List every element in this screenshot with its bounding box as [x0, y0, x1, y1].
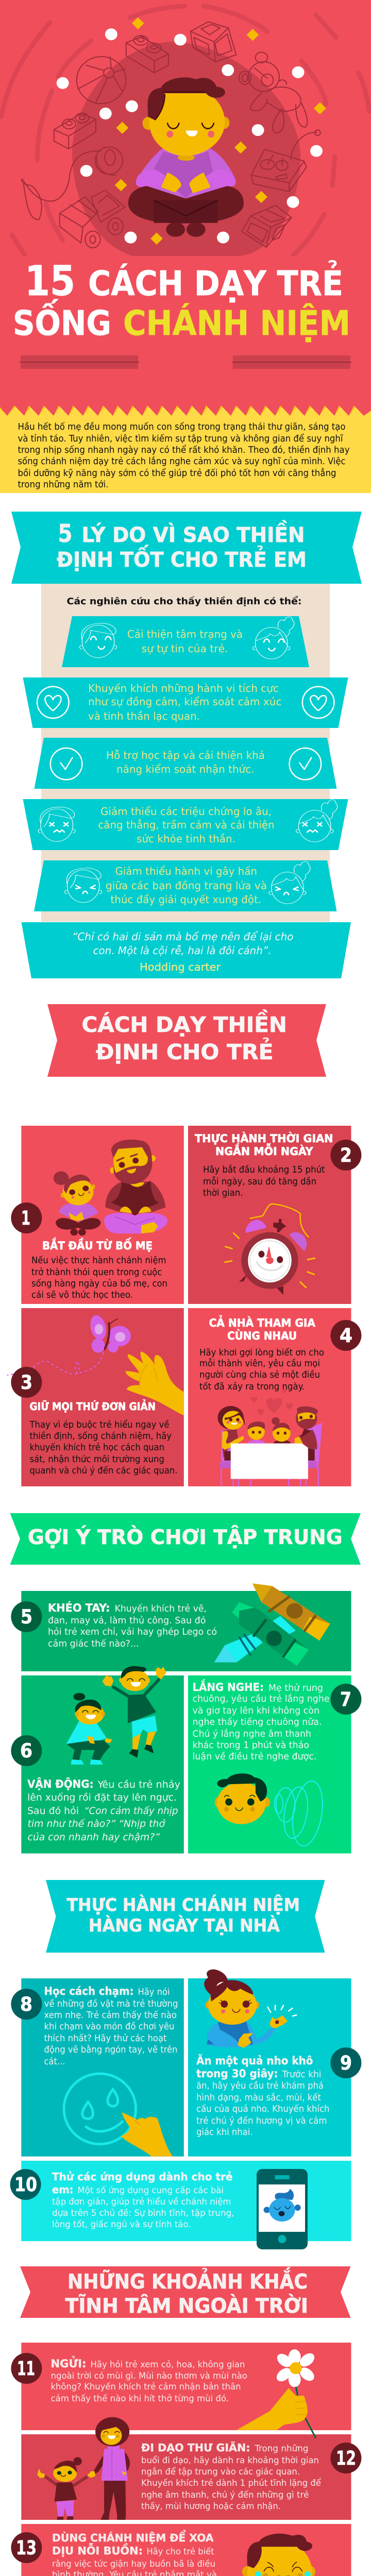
panel 3: keep it simple: GIỮ MỌI THỨ ĐƠN GIẢN — [30, 1400, 156, 1413]
text: step 4 body — [199, 1347, 324, 1392]
number badges 1-4: 3 — [21, 1371, 32, 1394]
text: step 11 body: ngoài trời có mùi gì. Mùi nào thơm và mùi nào — [50, 2371, 247, 2381]
card: mood and confidence — [62, 616, 309, 667]
illustration: crying child — [226, 2534, 339, 2576]
heading: how to teach meditation banner: ĐỊNH CHO TRẺ — [96, 1037, 273, 1064]
heading: how to teach meditation banner: CÁCH DẠY THIỀN — [81, 1009, 287, 1037]
panel 2: short daily practice — [188, 1126, 351, 1304]
text: step 9 body: trẻ chú ý đến hương vị và cảm — [196, 2115, 327, 2126]
text: step 8 body: xem nhẹ. Trẻ cảm thấy thế nào — [44, 2010, 177, 2021]
illustration: meditating child surrounded by toys — [1, 6, 369, 256]
number badges 11-13: 13 — [16, 2537, 37, 2559]
text: step 9 body — [196, 2054, 330, 2138]
illustration: crayons — [214, 1583, 330, 1666]
number badges 8-10 — [10, 1989, 361, 2200]
icon: smiling girl — [253, 617, 294, 659]
text: step 2 body — [203, 1164, 325, 1198]
panel 8: touch — [21, 1978, 184, 2157]
panel 2: short daily practice: THỰC HÀNH THỜI GIAN — [195, 1132, 333, 1145]
panel 9: raisin — [188, 1969, 351, 2157]
card: anxiety reduction: căng thẳng, trầm cảm và cải thiện — [98, 819, 274, 831]
intro text: sống chánh niệm dạy trẻ cách lắng nghe cảm xúc và suy nghĩ của mình. Việc — [18, 456, 345, 467]
number badges 5-7: 7 — [340, 1688, 351, 1710]
card: aggression reduction — [34, 860, 337, 911]
text: step 10 body: lòng tốt, giấc ngủ và sự tỉnh táo. — [52, 2219, 191, 2229]
card: quote: con. Một là cội rễ, hai là đôi cánh”. — [93, 944, 271, 957]
card: learning support: Hỗ trợ học tập và cải thiện khả — [106, 749, 265, 761]
text: step 2 body: thời gian. — [203, 1188, 243, 1198]
card: anxiety reduction — [23, 799, 348, 850]
number badges 5-7: 5 — [21, 1606, 32, 1628]
text: step 12 body: nghe âm thanh, chú ý đến những gì trẻ — [141, 2490, 309, 2500]
text: step 12 body: ngắn để tập trung vào các giác quan. — [141, 2467, 300, 2477]
text: step 8 body: cát... — [44, 2057, 65, 2067]
text: step 10 body: Thử các ứng dụng dành cho trẻ — [52, 2171, 233, 2183]
icon: frowning girl — [269, 861, 310, 904]
text: step 9 body: cấu của quả nho. Khuyến khích — [196, 2104, 330, 2114]
text: step 7 body: Chú ý lắng nghe âm thanh — [193, 1728, 311, 1739]
illustration: finger tracing a smiley — [64, 2074, 173, 2157]
text: step 12 body: buổi đi dạo, hãy dành ra khoảng thời gian — [141, 2455, 319, 2465]
number badges 11-13 — [11, 2353, 361, 2563]
text: step 6 body: của con nhanh hay chậm?” — [28, 1832, 160, 1843]
heading: daily practice banner: HÀNG NGÀY TẠI NHÀ — [89, 1915, 280, 1936]
icon: smiling boy — [80, 623, 117, 658]
illustration: jumping children — [66, 1666, 166, 1765]
text: step 13 body: DỊU NỖI BUỒN: — [52, 2543, 143, 2557]
text: step 11 body: NGỬI: — [50, 2356, 87, 2370]
text: step 7 body: luận về điều trẻ nghe được. — [193, 1751, 316, 1762]
text: step 8 body: động vẽ bằng ngón tay, vẽ trên — [44, 2044, 177, 2055]
card: mood and confidence: Cải thiện tâm trạng và — [127, 628, 243, 640]
title: CHÁNH NIỆM — [123, 303, 350, 343]
text: step 5 body: Khuyến khích trẻ vẽ, — [114, 1603, 207, 1614]
panel 6: movement — [21, 1666, 184, 1854]
text: step 6 body: lên xuống rồi đặt tay lên ngực. — [27, 1792, 177, 1803]
card: aggression reduction: giữa các bạn đồng trang lứa và — [106, 879, 267, 892]
panel: introduction — [0, 405, 371, 493]
card: mood and confidence: sự tự tin của trẻ. — [141, 642, 228, 655]
heading: daily practice banner — [46, 1880, 325, 1953]
card: learning support: năng kiểm soát nhận thức. — [116, 763, 255, 775]
card: anxiety reduction: sức khỏe tinh thần. — [137, 833, 235, 845]
text: step 5 body: hỏi trẻ xem chỉ, vải hay ghép Lego có — [48, 1627, 217, 1637]
text: step 12 body: Trong những — [254, 2444, 308, 2453]
heading: focus games banner — [10, 1513, 361, 1565]
text: step 10 body: em: — [52, 2183, 73, 2196]
card: positive behaviours: như sự đồng cảm, kiểm soát cảm xúc — [88, 696, 281, 708]
panel 13: soothing sadness — [21, 2524, 351, 2576]
text: step 4 body: người cùng chia sẻ một điều — [199, 1369, 320, 1380]
number badges 8-10: 8 — [20, 1993, 32, 2015]
panel 4: whole family: CẢ NHÀ THAM GIA — [209, 1315, 315, 1329]
text: step 6 body: tim như thế nào?” “Nhịp thở — [28, 1818, 166, 1829]
decorative bars — [20, 355, 351, 369]
text: step 12 body — [141, 2442, 321, 2511]
card: quote: Hodding carter — [140, 961, 221, 973]
panel 1: start with parents: BẮT ĐẦU TỪ BỐ MẸ — [42, 1238, 153, 1252]
panel 4: whole family — [188, 1308, 351, 1486]
text: step 10 body: dựa trên 5 chủ đề: Sự bình tĩnh, tập trung, — [52, 2208, 234, 2218]
text: step 7 body — [193, 1679, 330, 1762]
text: step 8 body: Học cách chạm: — [44, 1985, 134, 1997]
card: anxiety reduction: Giảm thiểu các triệu chứng lo âu, — [100, 805, 272, 818]
text: step 2 body: mỗi ngày, sau đó tăng dần — [203, 1176, 316, 1187]
illustration: father and daughter meditating — [54, 1140, 167, 1235]
text: step 13 body: rằng việc tức giận hay buồn bã là điều — [52, 2559, 215, 2569]
text: step 9 body: hình dạng, màu sắc, mùi, kết — [196, 2092, 321, 2103]
icon: heart badges — [37, 687, 334, 718]
text: step 8 body: Hãy nói — [138, 1987, 170, 1997]
text: step 5 body: đan, may vá, làm thủ công. Sau đó — [48, 1616, 206, 1626]
text: step 11 body: cảm thấy thế nào khi hít thở từng mùi đó. — [50, 2394, 229, 2403]
illustration: smiling alarm clock — [224, 1204, 315, 1295]
number badges 8-10: 9 — [340, 2052, 352, 2074]
text: step 3 body: sát, nhận thức môi trường xung — [30, 1454, 164, 1465]
illustration: girl holding a raisin — [204, 1969, 297, 2048]
text: step 1 body — [31, 1255, 167, 1300]
text: step 9 body: trong 30 giây: — [196, 2067, 278, 2080]
card: positive behaviours: và tinh thần lạc quan. — [88, 710, 200, 722]
text: step 3 body: thiền định, sống chánh niệm, hãy — [30, 1431, 172, 1442]
text: step 7 body: khác trong 1 phút và thảo — [193, 1740, 309, 1751]
card: aggression reduction: thúc đẩy giải quyết xung đột. — [110, 893, 261, 906]
number badges 11-13: 12 — [336, 2447, 356, 2469]
text: step 7 body: chuông, yêu cầu trẻ lắng nghe — [193, 1693, 330, 1704]
text: step 6 body: Sau đó hỏi — [27, 1805, 79, 1817]
text: step 3 body — [29, 1419, 177, 1476]
text: step 4 body: Hãy khơi gợi lòng biết ơn cho — [199, 1347, 324, 1358]
card: positive behaviours — [23, 677, 348, 728]
panel 3: keep it simple — [7, 1308, 184, 1486]
icon: dizzy boy — [38, 807, 75, 841]
title: CÁCH DẠY TRẺ — [88, 260, 343, 303]
text: step 6 body: VẬN ĐỘNG: — [27, 1777, 94, 1790]
number badges 1-4 — [11, 1140, 361, 1398]
heading: 5 reasons banner: 5 — [58, 519, 72, 548]
panel 5: handiwork — [21, 1583, 351, 1671]
panel 7: listening — [188, 1675, 351, 1854]
intro text — [18, 421, 349, 490]
text: step 1 body: Nếu việc thực hành chánh niệm — [31, 1255, 166, 1266]
panel 4: whole family: CÙNG NHAU — [227, 1329, 297, 1342]
panel 12: relaxing walk — [21, 2417, 351, 2520]
card: aggression reduction: Giảm thiểu hành vi gây hấn — [115, 865, 257, 877]
card: quote: “Chỉ có hai di sản mà bố mẹ nên để lại cho — [72, 930, 294, 943]
text: step 9 body: ăn, hãy yêu cầu trẻ khám phá — [196, 2080, 324, 2091]
text: step 12 body: Khuyến khích trẻ dành 1 phút tĩnh lặng để — [141, 2478, 321, 2488]
icon: check badges — [50, 748, 321, 779]
intro text: trong những năm tới. — [18, 480, 108, 490]
illustration: mother and child walking — [37, 2417, 130, 2520]
text: step 10 body — [52, 2171, 234, 2229]
text: step 12 body: ĐI DẠO THƯ GIÃN: — [141, 2442, 250, 2454]
text: step 4 body: mỗi thành viên, yêu cầu mọi — [199, 1358, 320, 1369]
icon: frowning boy — [65, 868, 102, 903]
text: step 6 body: Yêu cầu trẻ nhảy — [97, 1779, 180, 1790]
research lead-in: Các nghiên cứu cho thấy thiền định có thể: — [67, 596, 302, 607]
heading: daily practice banner: THỰC HÀNH CHÁNH NIỆM — [67, 1894, 300, 1916]
heading: 5 reasons banner — [11, 512, 362, 584]
text: step 9 body: Ăn một quả nho khô — [196, 2054, 313, 2067]
card: learning support — [34, 738, 337, 789]
text: step 10 body: tập đơn giản, giúp trẻ hiểu về chánh niệm — [52, 2197, 231, 2207]
text: step 3 body: khuyến khích trẻ học cách quan — [30, 1442, 164, 1453]
number badges 1-4: 4 — [340, 1325, 352, 1347]
illustration: boy listening to sound waves — [215, 1773, 326, 1847]
illustration: family at the table — [217, 1389, 322, 1486]
text: step 4 body: tốt đã xảy ra trong ngày. — [199, 1381, 305, 1392]
intro text: bồi dưỡng kỹ năng này sớm có thể giúp trẻ đối phó tốt hơn với căng thẳng — [18, 468, 336, 479]
icon: smartphone with calm face — [257, 2169, 308, 2249]
panel: hero — [0, 0, 371, 407]
heading: 5 reasons banner: ĐỊNH TỐT CHO TRẺ EM — [57, 544, 307, 572]
number badges 11-13: 11 — [17, 2358, 35, 2380]
text: step 11 body — [50, 2356, 247, 2403]
heading: outdoor moments banner: TĨNH TÂM NGOÀI TRỜI — [65, 2294, 308, 2318]
heading: outdoor moments banner: NHỮNG KHOẢNH KHẮC — [68, 2267, 308, 2294]
text: step 1 body: trở thành thói quen trong cuộc — [31, 1267, 162, 1278]
text: step 9 body: giác khi nhai. — [196, 2127, 252, 2138]
illustration: hand holding a daisy — [237, 2349, 317, 2438]
icon: dizzy girl — [296, 800, 338, 842]
text: step 12 body: thấy, mùi hương hoặc cảm nhận. — [141, 2501, 281, 2511]
text: step 10 body: Một số ứng dụng cung cấp các bài — [77, 2185, 224, 2195]
text: step 3 body: quanh và chú ý đến các giác quan. — [30, 1465, 177, 1476]
heading: focus games banner: GỢI Ý TRÒ CHƠI TẬP TRUNG — [28, 1525, 342, 1549]
panel 10: children's apps — [21, 2161, 351, 2249]
text: step 2 body: Hãy bắt đầu khoảng 15 phút — [203, 1164, 325, 1175]
panel: reasons background — [41, 584, 330, 922]
text: step 8 body: khi chạm vào món đồ chơi yêu — [44, 2021, 174, 2032]
text: step 7 body: nghe thấy tiếng chuông nữa. — [193, 1717, 322, 1727]
text: step 8 body — [44, 1985, 178, 2067]
text: step 5 body: KHÉO TAY: — [48, 1601, 110, 1614]
text: step 13 body: Hãy cho trẻ biết — [146, 2547, 214, 2556]
number badges 5-7 — [11, 1601, 361, 1766]
card: quote — [22, 922, 351, 978]
text: step 13 body — [52, 2531, 217, 2576]
text: step 1 body: sống hàng ngày của bố mẹ, con — [31, 1278, 167, 1289]
text: step 8 body: về những đồ vật mà trẻ thường — [44, 1998, 178, 2009]
text: step 3 body: Thay vì ép buộc trẻ hiểu ngay về — [29, 1419, 169, 1430]
text: step 9 body: Trước khi — [281, 2070, 322, 2080]
text: step 7 body: LẮNG NGHE: — [193, 1679, 264, 1693]
text: step 7 body: và giơ tay lên khi không còn — [193, 1706, 319, 1716]
title: 15 — [25, 257, 75, 305]
text: step 7 body: Mẹ thử rung — [268, 1683, 323, 1693]
number badges 1-4: 1 — [21, 1207, 30, 1229]
text: step 5 body — [48, 1601, 217, 1649]
panel 1: start with parents — [21, 1126, 184, 1304]
number badges 5-7: 6 — [20, 1740, 32, 1762]
panel 11: smell — [21, 2343, 351, 2430]
text: step 11 body: Hãy hỏi trẻ xem cỏ, hoa, không gian — [91, 2360, 245, 2369]
number badges 1-4: 2 — [340, 1144, 352, 1166]
text: step 13 body: DÙNG CHÁNH NIỆM ĐỂ XOA — [52, 2531, 214, 2544]
heading: how to teach meditation banner — [47, 1004, 326, 1077]
intro text: Hầu hết bố mẹ đều mong muốn con sống trong trạng thái thư giãn, sáng tạo — [18, 421, 345, 432]
intro text: trong nhịp sống nhanh ngày nay có thể rất khó khăn. Theo đó, thiền định hay — [18, 445, 349, 455]
number badges 8-10: 10 — [14, 2174, 37, 2196]
card: positive behaviours: Khuyến khích những hành vi tích cực — [88, 682, 279, 694]
heading: outdoor moments banner — [20, 2266, 350, 2318]
text: step 6 body: “Con cảm thấy nhịp — [84, 1805, 178, 1817]
text: step 8 body: thích nhất? Hãy thử các hoạt — [44, 2033, 167, 2044]
heading: 5 reasons banner: LÝ DO VÌ SAO THIỀN — [81, 519, 305, 547]
title: SỐNG — [13, 299, 111, 343]
text: step 6 body — [27, 1777, 180, 1843]
illustration: butterfly and hand — [7, 1314, 184, 1415]
text: step 5 body: cảm giác thế nào?... — [48, 1638, 139, 1649]
title — [0, 256, 371, 407]
panel 2: short daily practice: NGẮN MỖI NGÀY — [215, 1143, 313, 1158]
text: step 1 body: cái sẽ vô thức học theo. — [31, 1290, 133, 1300]
text: step 11 body: không? Khuyến khích trẻ cảm nhận bản thân — [50, 2382, 241, 2392]
intro text: và tỉnh táo. Tuy nhiên, việc tìm kiếm sự tập trung và không gian để suy nghĩ — [18, 433, 343, 444]
